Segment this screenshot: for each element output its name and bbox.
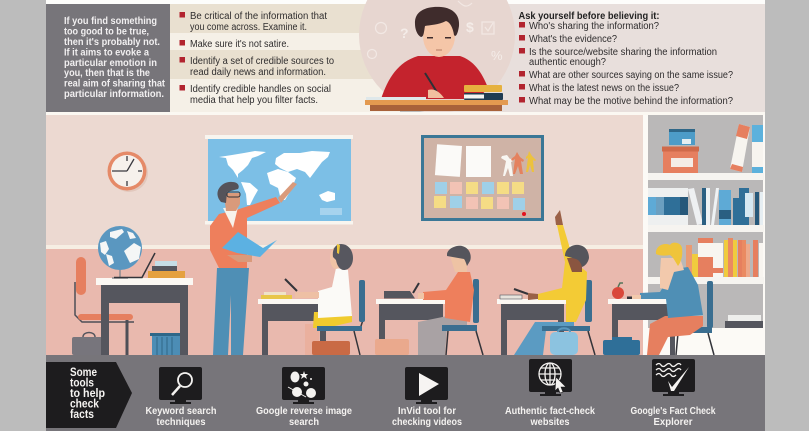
label: authentic websites: websites <box>530 416 570 428</box>
panel: warning text: particular emotion in <box>64 58 157 69</box>
label: keyword search <box>146 405 216 428</box>
student desk 1 <box>258 279 328 355</box>
bulletin board <box>422 136 542 220</box>
panel: questions list: Who's sharing the information? <box>529 21 659 32</box>
panel: tips list <box>170 4 400 112</box>
laptop and books <box>114 253 185 278</box>
label: fact check explorer <box>630 405 716 428</box>
callout: some tools to help check facts: check <box>70 396 99 410</box>
icon: video play monitor <box>405 367 448 404</box>
label: fact check explorer: Explorer <box>654 416 692 428</box>
student 1 <box>295 244 365 355</box>
panel: questions list: Is the source/website sharing the information <box>529 47 717 58</box>
panel: questions list: What is the latest news on the issue? <box>529 83 679 94</box>
student 3 <box>514 210 595 355</box>
label: keyword search: Keyword search <box>146 405 216 417</box>
callout: some tools to help check facts: to help <box>70 386 105 400</box>
panel: warning text: real aim of sharing that <box>64 78 166 90</box>
panel: tips list: you come across. Examine it. <box>190 22 307 33</box>
student desk 4 with apple <box>608 283 679 355</box>
label: authentic websites: Authentic fact-check <box>505 405 595 417</box>
bookshelf <box>643 115 765 355</box>
icon: globe cursor monitor <box>529 359 572 396</box>
backpack and bag <box>603 337 640 355</box>
panel: questions list <box>518 11 733 107</box>
illustration: student at desk: ? <box>400 25 409 41</box>
label: invid tool: InVid tool for <box>398 405 456 417</box>
panel: warning text: If it aims to evoke a <box>64 48 149 58</box>
blue books <box>648 188 763 225</box>
label: fact check explorer: Google's Fact Check <box>630 405 716 417</box>
panel: tips list: read daily news and information. <box>190 67 326 78</box>
panel: tips list: Identify a set of credible sources to <box>190 56 334 67</box>
panel: classroom scene <box>46 115 765 355</box>
panel: warning text <box>46 4 170 112</box>
label: invid tool: checking videos <box>392 416 462 428</box>
panel: warning text: you, then that is the <box>64 68 150 79</box>
icon: wall clock <box>108 152 148 192</box>
panel: warning text: then it's probably not. <box>64 37 160 48</box>
illustration: student at desk <box>365 1 508 111</box>
label: reverse image search: Google reverse image <box>256 405 352 417</box>
globe <box>98 226 142 278</box>
icon: space image monitor <box>282 367 325 404</box>
panel: questions list: What are other sources saying on the same issue? <box>529 70 733 81</box>
callout: some tools to help check facts: tools <box>70 376 94 390</box>
panel: tips list: Make sure it's not satire. <box>190 39 289 50</box>
illustration: student at desk: % <box>491 48 503 63</box>
panel: warning text: particular information. <box>64 89 164 100</box>
callout: some tools to help check facts: facts <box>70 407 94 421</box>
teacher's chair <box>72 257 134 355</box>
panel: questions list: What may be the motive behind the information? <box>529 96 733 107</box>
student desk 2 <box>375 283 447 355</box>
panel: questions background <box>359 0 765 113</box>
panel: tips list: media that help you filter facts. <box>190 95 318 106</box>
panel: tools band <box>46 355 765 431</box>
orange and yellow books <box>686 238 763 277</box>
label: keyword search: techniques <box>156 416 206 428</box>
leaning books top shelf <box>730 124 763 173</box>
icon: magnifying glass monitor <box>159 367 202 404</box>
panel: questions list: What's the evidence? <box>529 34 617 45</box>
panel: tips list: Identify credible handles on social <box>190 84 331 95</box>
student 2 <box>418 246 483 355</box>
student desk 3 <box>497 289 568 355</box>
panel: warning text: too good to be true, <box>64 26 149 38</box>
waste bin <box>150 333 180 355</box>
icon: waves and check monitor <box>652 359 695 396</box>
panel: tips list: Be critical of the information that <box>190 11 327 22</box>
boxes <box>662 129 699 173</box>
illustration: student at desk: $ <box>466 19 474 35</box>
callout: some tools to help check facts: Some <box>70 365 97 379</box>
wall map <box>205 135 353 224</box>
label: reverse image search <box>256 405 352 428</box>
student 4 <box>632 243 714 355</box>
panel: questions list: Ask yourself before believing it: <box>518 11 660 22</box>
callout: some tools to help check facts <box>46 362 132 428</box>
panel: warning text: If you find something <box>64 16 157 27</box>
teacher <box>210 182 297 355</box>
label: reverse image search: search <box>289 416 319 428</box>
teacher's desk <box>96 278 193 355</box>
panel: questions list: authentic enough? <box>529 57 606 68</box>
label: authentic websites <box>505 405 595 428</box>
label: invid tool <box>392 405 462 428</box>
